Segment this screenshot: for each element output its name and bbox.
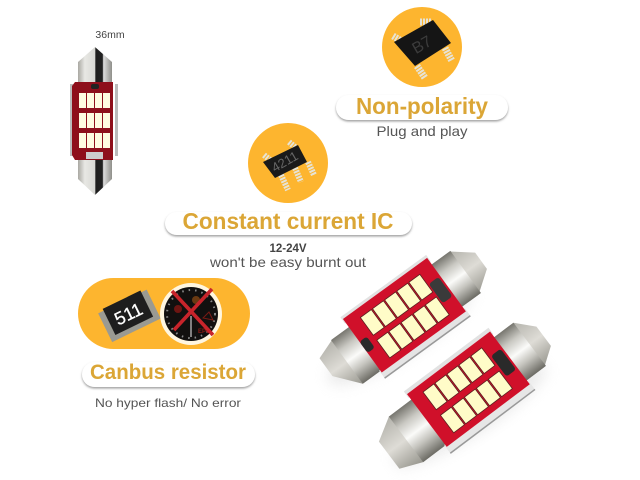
- caption: won't be easy burnt out: [209, 254, 366, 270]
- circuit board: [72, 82, 113, 160]
- bulb cap bottom: [78, 156, 112, 195]
- bulb cap top: [78, 47, 112, 84]
- pill heading: Non-polarity: [356, 93, 488, 119]
- pill heading: Constant current IC: [182, 208, 394, 234]
- caption: No hyper flash/ No error: [95, 396, 241, 410]
- icon: 511 resistor: 511: [111, 299, 146, 329]
- label: 36mm: 36mm: [95, 29, 125, 41]
- small bulb with 36mm label: [70, 29, 125, 195]
- feature: Canbus resistor: [78, 278, 255, 410]
- icon: B7 chip: [382, 7, 462, 87]
- icon: B7 chip: B7: [410, 33, 435, 58]
- icon: crossed-out dashboard gauge: EPC: [198, 329, 211, 335]
- orange icon panel: [78, 278, 250, 349]
- caption: Plug and play: [376, 123, 468, 139]
- large LED bulb, upper: [307, 231, 504, 403]
- pill heading: Canbus resistor: [90, 361, 246, 384]
- icon: 511 resistor: [97, 288, 161, 342]
- voltage label: 12-24V: [269, 243, 307, 255]
- icon: 4211 chip: 4211: [269, 148, 301, 175]
- icon: 4211 chip: [248, 123, 328, 203]
- large LED bulb, lower: [364, 304, 567, 480]
- icon: crossed-out dashboard gauge: [160, 283, 222, 345]
- LED grid: [79, 93, 110, 148]
- feature: Non-polarity: [336, 7, 508, 139]
- feature: Constant current IC: [165, 123, 412, 270]
